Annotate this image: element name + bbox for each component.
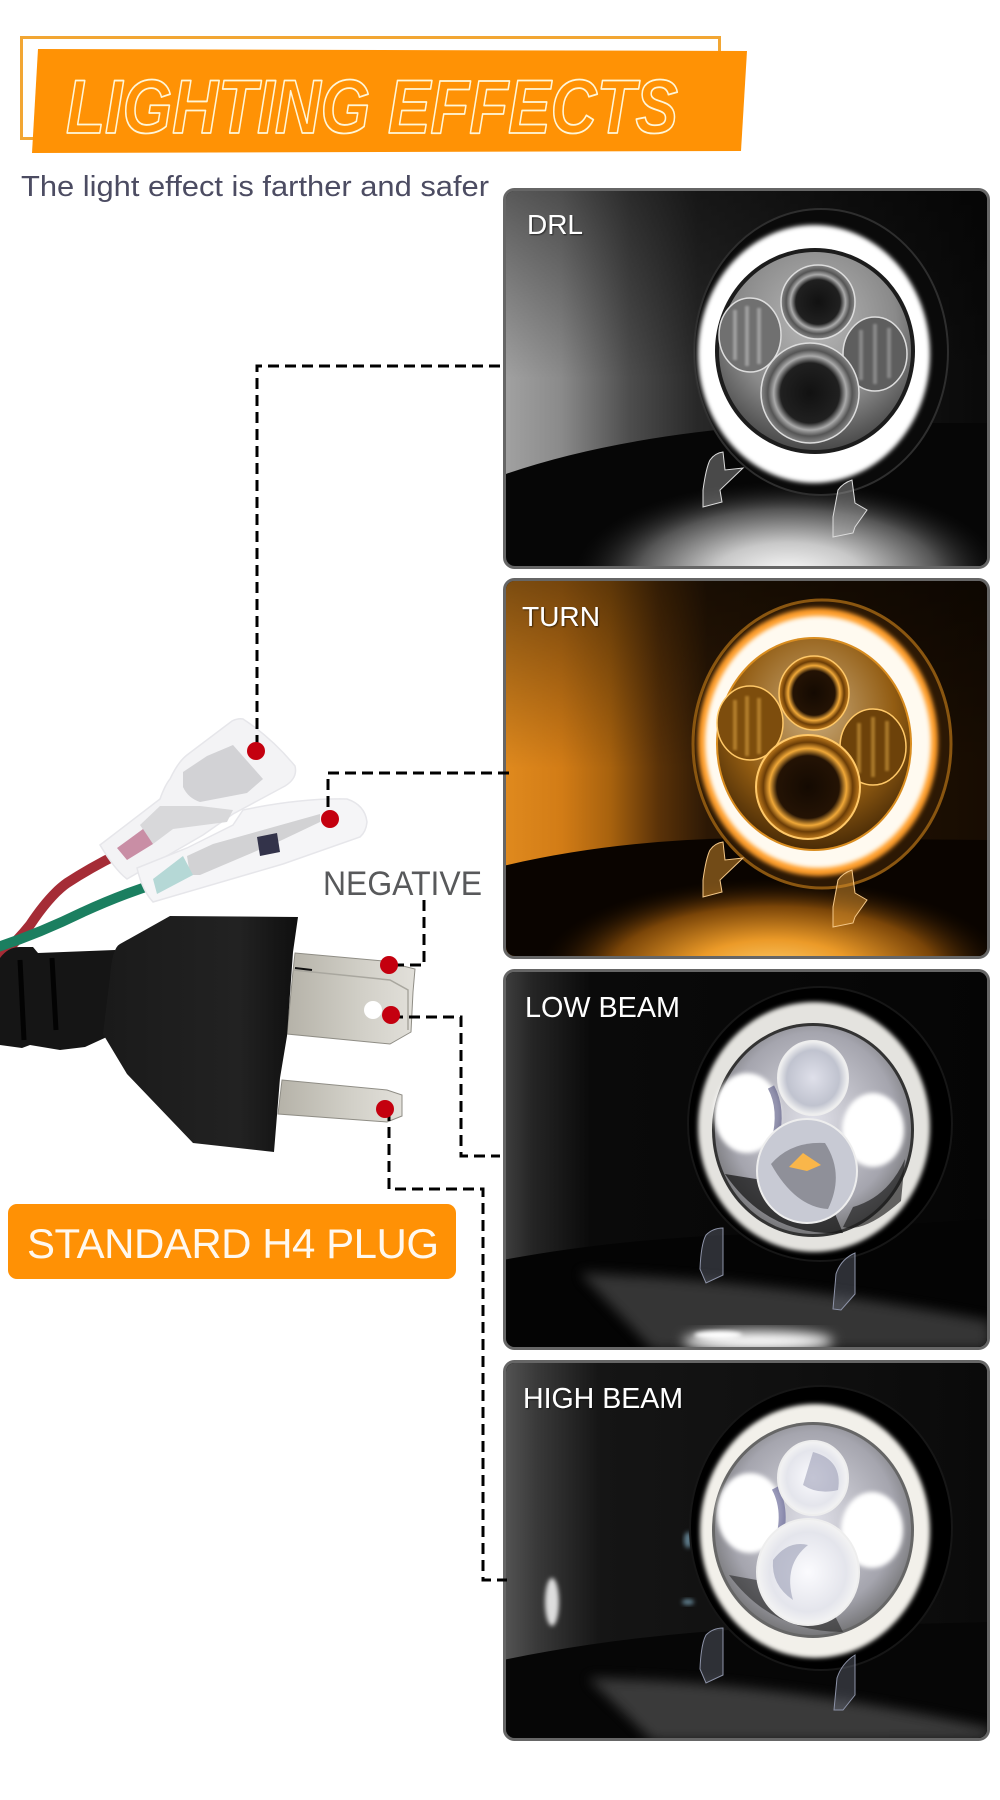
stands — [700, 1628, 855, 1710]
reflection — [545, 1578, 559, 1626]
label: LOW BEAM: LOW BEAM — [525, 992, 680, 1024]
pins — [287, 953, 415, 1044]
plug body — [103, 916, 298, 1152]
panel: HIGH BEAM — [503, 1360, 990, 1741]
lamp — [693, 600, 951, 888]
callout: standard H4 plug — [8, 1204, 456, 1279]
lamp — [688, 987, 952, 1261]
green wire — [0, 884, 155, 947]
pin hole — [364, 1001, 382, 1019]
title: LIGHTING EFFECTS — [66, 65, 678, 150]
panel: TURN — [503, 578, 990, 959]
stands — [703, 452, 867, 537]
panel: DRL — [503, 188, 990, 569]
stands — [700, 1228, 855, 1310]
subtitle: The light effect is farther and safer — [21, 171, 489, 203]
callout: standard H4 plug: STANDARD H4 PLUG — [27, 1220, 439, 1267]
dashed connector: DRL — [257, 366, 500, 745]
heading banner — [32, 49, 747, 153]
label: HIGH BEAM: HIGH BEAM — [523, 1383, 683, 1415]
H4 plug — [0, 916, 415, 1152]
dashed connector: NEGATIVE — [392, 900, 424, 965]
panel: LOW BEAM — [503, 969, 990, 1351]
heading outline frame — [22, 38, 720, 138]
dashed connector: HIGH BEAM — [389, 1110, 507, 1580]
harness connectors and wires — [0, 719, 367, 957]
stands — [703, 842, 867, 927]
red wire — [0, 854, 118, 957]
label: NEGATIVE: NEGATIVE — [323, 865, 482, 903]
label: DRL: DRL — [527, 209, 583, 240]
lamp — [690, 1386, 952, 1670]
lower spade connector — [137, 799, 367, 902]
label: TURN: TURN — [522, 601, 600, 632]
upper spade connector — [100, 719, 296, 879]
connection dots — [247, 742, 400, 1118]
dashed connector: TURN — [328, 773, 509, 815]
cable — [0, 947, 122, 1050]
dashed connector: LOW BEAM — [392, 1017, 500, 1156]
lamp — [694, 209, 948, 495]
